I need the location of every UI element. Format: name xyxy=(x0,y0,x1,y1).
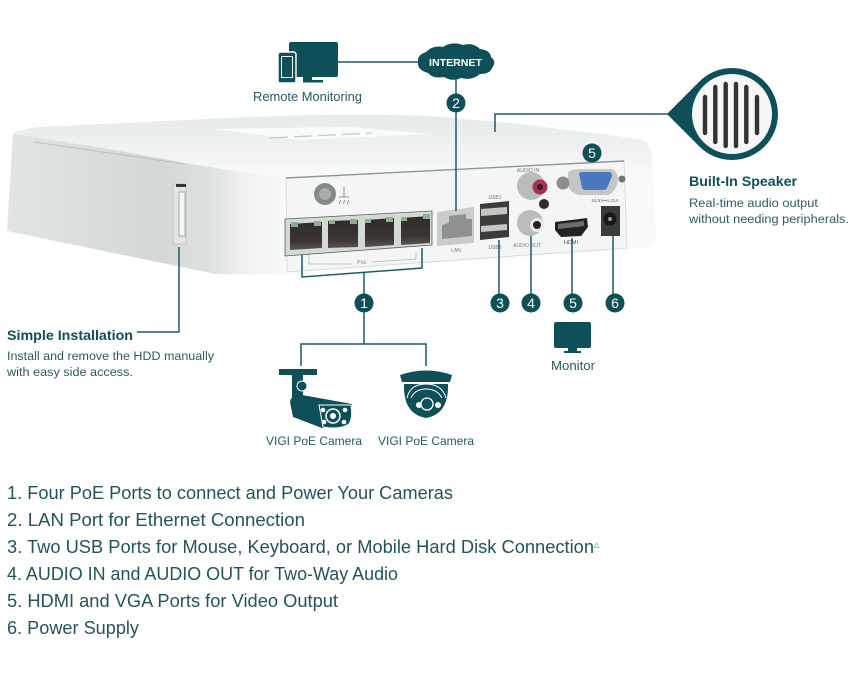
list item 3: △ xyxy=(594,542,600,549)
connector: USB, audio, HDMI, power xyxy=(499,235,613,295)
list item 4: 4. AUDIO IN and AUDIO OUT for Two-Way Audio xyxy=(7,564,398,584)
bullet camera icon xyxy=(279,369,352,428)
list item 6: 6. Power Supply xyxy=(7,618,139,638)
device: NVR recorder xyxy=(7,115,656,275)
audio in jack xyxy=(517,168,549,209)
callout number 4 xyxy=(522,294,540,312)
speaker magnifier xyxy=(667,68,778,160)
list item 1: 1. Four PoE Ports to connect and Power Your Cameras xyxy=(7,483,453,503)
device left side xyxy=(7,134,286,274)
PoE label xyxy=(309,253,416,266)
camera label right: VIGI PoE Camera xyxy=(378,434,474,448)
HDMI port xyxy=(555,218,588,246)
callout number 1 xyxy=(354,294,374,312)
simple installation description: with easy side access. xyxy=(6,365,133,379)
callout number 3: 3 xyxy=(496,295,504,311)
audio in jack: AUDIO IN xyxy=(517,168,539,174)
rear panel recess xyxy=(286,161,627,272)
simple installation heading: Simple Installation xyxy=(7,328,133,343)
LAN port xyxy=(437,207,474,254)
LAN port: LAN xyxy=(451,248,461,254)
VGA port xyxy=(556,169,626,195)
HDMI port: HDMI xyxy=(564,240,578,246)
simple installation description xyxy=(6,349,215,379)
built-in speaker description: without needing peripherals. xyxy=(688,212,849,226)
top label plate xyxy=(213,127,430,140)
connector: monitoring to internet xyxy=(338,61,420,63)
PoE ports xyxy=(285,211,432,256)
callout number 5 (VGA) xyxy=(582,144,602,162)
callout number 6 xyxy=(606,294,624,312)
HDD slot xyxy=(173,184,186,244)
USB ports: USB2 xyxy=(488,245,502,251)
built-in speaker heading: Built-In Speaker xyxy=(689,174,798,189)
remote monitoring label: Remote Monitoring xyxy=(253,89,362,104)
monitor label: Monitor xyxy=(551,359,595,373)
internet cloud: INTERNET xyxy=(429,58,482,69)
list item 5: 5. HDMI and VGA Ports for Video Output xyxy=(7,591,338,611)
PoE label: PoE xyxy=(357,260,367,266)
power jack: 53.5V⎓1.21A xyxy=(591,198,619,203)
USB ports xyxy=(480,195,509,251)
audio out jack: AUDIO OUT xyxy=(513,243,541,249)
simple installation description: Install and remove the HDD manually xyxy=(7,349,215,363)
connector: cameras xyxy=(301,312,426,366)
callout number 5 (VGA): 5 xyxy=(588,145,596,161)
callout number 6: 6 xyxy=(611,295,619,311)
device top surface xyxy=(7,115,656,275)
connector: speaker xyxy=(495,114,668,132)
callout number 4: 4 xyxy=(527,295,535,311)
monitor icon xyxy=(554,322,591,353)
callout number 2: 2 xyxy=(452,95,460,111)
feature list xyxy=(7,483,600,638)
connector: LAN to internet xyxy=(455,78,457,211)
camera label left: VIGI PoE Camera xyxy=(266,434,362,448)
list item 3: 3. Two USB Ports for Mouse, Keyboard, or Mobile Hard Disk Connection xyxy=(7,537,594,557)
callout number 3 xyxy=(490,294,510,312)
callout number 2 xyxy=(446,94,466,112)
audio out jack xyxy=(513,210,544,249)
built-in speaker description xyxy=(688,196,849,226)
PoE bracket connector xyxy=(302,248,422,295)
callout number 5 (HDMI): 5 xyxy=(569,295,577,311)
USB ports: USB1 xyxy=(488,195,502,201)
list item 2: 2. LAN Port for Ethernet Connection xyxy=(7,510,305,530)
power jack xyxy=(591,198,620,236)
callout number 1: 1 xyxy=(360,295,368,311)
dome camera icon xyxy=(400,370,452,418)
internet cloud xyxy=(418,43,494,80)
HDD connector xyxy=(137,247,179,332)
callout number 5 (HDMI) xyxy=(564,294,582,312)
remote monitoring icon xyxy=(278,42,338,83)
built-in speaker description: Real-time audio output xyxy=(689,196,819,210)
ground screw xyxy=(314,183,349,205)
